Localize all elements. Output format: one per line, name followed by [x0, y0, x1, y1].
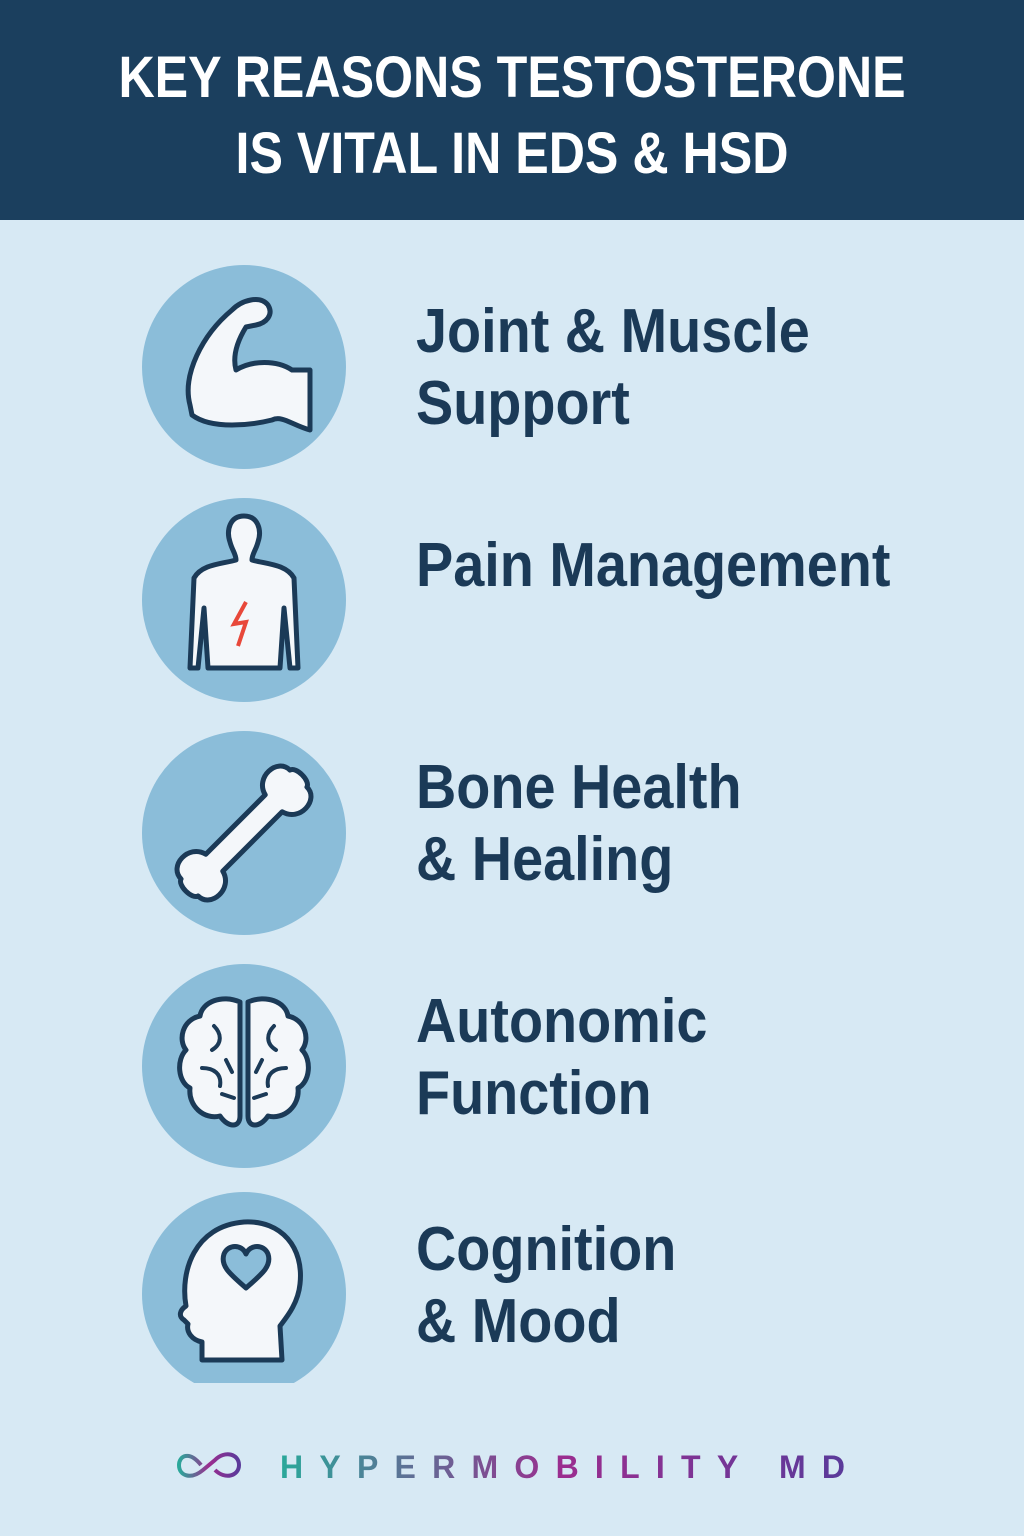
label: autonomic function: Function — [416, 1059, 652, 1128]
label: bone health & healing — [416, 753, 742, 894]
label: cognition & mood: & Mood — [416, 1287, 621, 1356]
label: joint & muscle support: Joint & Muscle — [416, 297, 810, 366]
label: cognition & mood: Cognition — [416, 1215, 676, 1284]
label: bone health & healing: Bone Health — [416, 753, 742, 822]
icon: head with heart — [142, 1192, 346, 1383]
label: bone health & healing: & Healing — [416, 825, 673, 894]
label: pain management: Pain Management — [416, 531, 890, 600]
label: joint & muscle support — [416, 297, 810, 438]
label: autonomic function: Autonomic — [416, 987, 707, 1056]
icon: body with pain — [142, 498, 346, 702]
title: IS VITAL IN EDS & HSD — [236, 121, 788, 186]
label: autonomic function — [416, 987, 707, 1128]
title: KEY REASONS TESTOSTERONE — [118, 45, 906, 110]
logo: hypermobility md: HYPERMOBILITY MD — [280, 1449, 845, 1485]
label: joint & muscle support: Support — [416, 369, 630, 438]
icon: flexed arm — [142, 265, 346, 469]
label: cognition & mood — [416, 1215, 676, 1356]
icon: brain — [142, 964, 346, 1168]
title — [0, 0, 1024, 220]
icon: bone — [142, 731, 346, 935]
